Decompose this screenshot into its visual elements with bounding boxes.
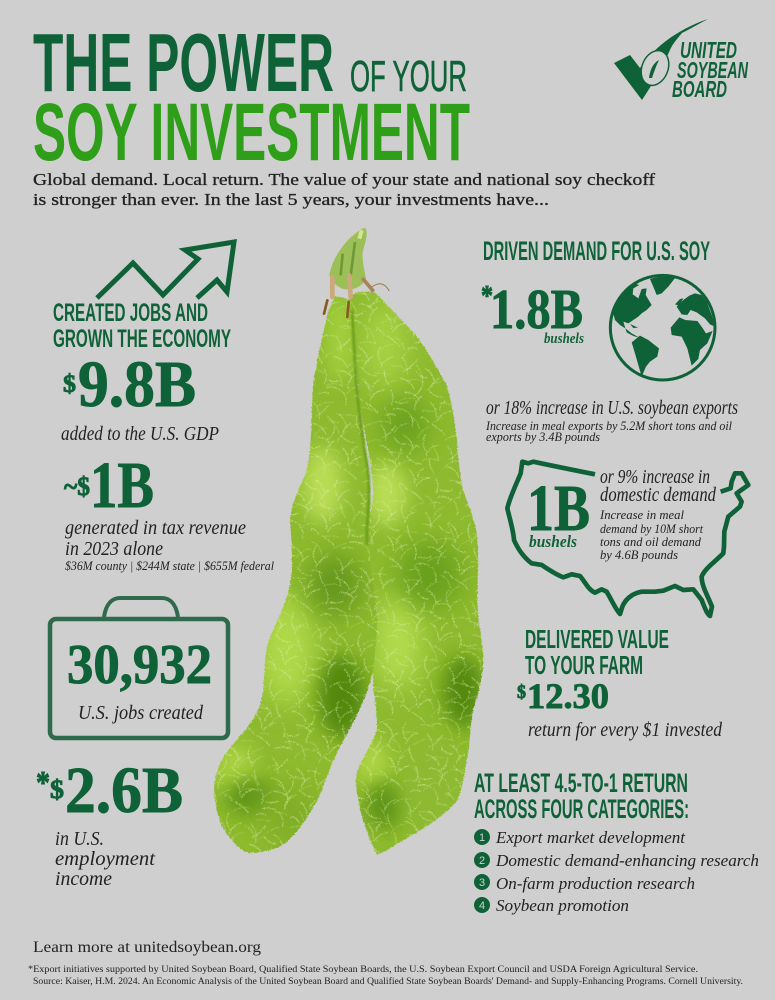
text: 9 percent increase: or 9% increase in [600,466,710,488]
intro text [33,170,655,209]
left pod [213,296,378,854]
soybean pods image [205,228,490,860]
icon: briefcase with jobs stat: 30,932 [67,634,212,696]
learn more link: Learn more at unitedsoybean.org [33,939,261,956]
stat: 1B tax revenue [64,449,274,573]
text: 18 percent increase [485,397,738,444]
logo: United Soybean Board [614,19,748,102]
icon: rising arrow [97,242,234,298]
stat: 1B tax revenue: 1B [90,449,154,522]
text: 9 percent increase: by 4.6B pounds [600,547,678,562]
logo: United Soybean Board: UNITED [680,37,737,63]
stat: 9.8B: $ [63,371,76,398]
stat: 12.30 return: 12.30 [527,676,609,716]
stat: 12.30 return: return for every $1 invested [528,719,723,741]
stat: 1B tax revenue: generated in tax revenue [65,517,246,539]
list item 3: On-farm production research [496,874,695,893]
list item 3: 3 [479,877,485,889]
stat: 1B tax revenue: in 2023 alone [65,538,163,560]
icon: briefcase with jobs stat [50,598,228,738]
list item 4: 4 [479,900,485,912]
intro text: Global demand. Local return. The value of your state and national soy checkoff [33,170,655,189]
stat: 9.8B [61,348,219,445]
stat: 2.6B employment income [36,754,183,890]
heading: jobs and economy: CREATED JOBS AND [53,299,208,327]
stem and sepals [324,228,389,317]
footnote: Source: Kaiser, H.M. 2024. An Economic Analysis of the United Soybean Board and Qualified State Soybean Boards' Demand- and Supply-Enhancing Programs. Cornell University. [33,976,743,987]
heading: delivered value: DELIVERED VALUE [525,624,669,654]
text: 9 percent increase: demand by 10M short [600,521,703,536]
stat: 1B bushels: 1B [527,472,590,545]
title [33,16,470,178]
stat: 1.8B bushels: 1.8B [490,279,583,341]
stat: 2.6B employment income: * [36,764,50,800]
text: 18 percent increase: exports by 3.4B pounds [486,429,600,444]
heading: four categories [474,768,689,824]
panel: jobs and economy [36,242,274,890]
stat: 2.6B employment income: income [55,868,112,890]
list item 2: 2 [479,855,485,867]
stat: 2.6B employment income: $ [50,775,64,804]
panel: four categories [474,768,759,915]
right pod [350,285,490,860]
footnote [28,964,743,987]
heading: jobs and economy: GROWN THE ECONOMY [53,325,231,353]
heading: jobs and economy [53,299,231,353]
stat: 1.8B bushels: bushels [544,331,584,347]
stat: 2.6B employment income: employment [55,848,155,870]
stat: 12.30 return: $ [517,682,526,703]
stat: 1B bushels: bushels [529,532,577,551]
stat: 1B tax revenue: ~$ [64,472,90,501]
text: 9 percent increase [599,466,717,562]
panel: driven demand [481,236,748,616]
list item 1: Export market development [495,828,686,847]
icon: U.S. map outline [507,462,748,616]
stat: 9.8B: added to the U.S. GDP [61,423,219,445]
list item 1: 1 [479,832,485,844]
stat: 2.6B employment income: in U.S. [55,828,104,850]
text: 9 percent increase: Increase in meal [599,507,684,522]
stat: 12.30 return [517,676,723,741]
title: THE POWER [33,16,334,109]
stat: 1B tax revenue: $36M county | $244M state | $655M federal [65,559,274,573]
seam between pods [352,310,369,545]
icon: briefcase with jobs stat: U.S. jobs created [78,702,204,724]
logo: United Soybean Board: BOARD [672,76,727,102]
stat: 2.6B employment income: 2.6B [65,754,183,827]
footnote: *Export initiatives supported by United Soybean Board, Qualified State Soybean Boards, the U.S. Soybean Export Council and USDA Foreign Agricultural Service. [28,964,698,975]
title: SOY INVESTMENT [33,87,470,178]
text: 9 percent increase: domestic demand [600,484,717,506]
panel: delivered value [517,624,723,741]
text: 9 percent increase: tons and oil demand [600,534,701,549]
icon: globe [610,275,715,380]
list item 2: Domestic demand-enhancing research [495,851,759,870]
list item 4: Soybean promotion [496,896,629,915]
text: 18 percent increase: Increase in meal exports by 5.2M short tons and oil [485,418,732,433]
title: OF YOUR [350,52,467,101]
heading: delivered value: TO YOUR FARM [525,650,643,680]
intro text: is stronger than ever. In the last 5 years, your investments have... [33,190,549,209]
stat: 9.8B: 9.8B [78,348,196,421]
stat: 1.8B bushels: * [481,281,493,312]
heading: delivered value [525,624,669,680]
